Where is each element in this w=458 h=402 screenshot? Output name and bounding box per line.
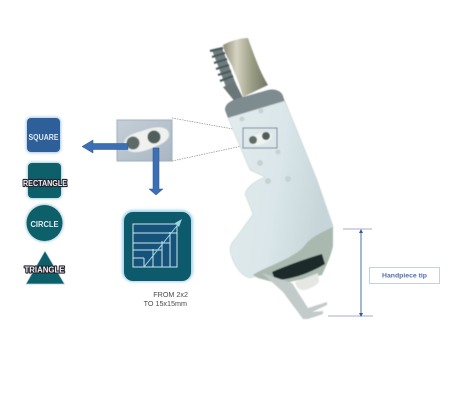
metal tube <box>223 38 268 97</box>
arrow: left to shapes <box>82 140 128 153</box>
lens <box>295 273 319 290</box>
clear guide <box>262 273 327 319</box>
text: size range <box>144 290 188 308</box>
icon: square shape: SQUARE <box>28 133 59 142</box>
hose: ribbed tube <box>210 48 243 103</box>
handpiece device <box>210 38 333 319</box>
tip window <box>253 227 333 284</box>
icon: triangle shape <box>24 251 65 284</box>
grey collar <box>225 89 285 118</box>
dark aperture <box>272 254 325 280</box>
panel: shape options <box>23 117 68 284</box>
label: handpiece tip: Handpiece tip <box>382 272 427 280</box>
icon: spot size grid <box>122 210 193 282</box>
body indents <box>240 108 291 184</box>
icon: rectangle shape <box>23 162 68 199</box>
label: handpiece tip <box>370 268 440 284</box>
icon: triangle shape: TRIANGLE <box>24 266 65 274</box>
text: size range: FROM 2x2 <box>153 290 188 299</box>
arrow: down to size icon <box>149 148 163 195</box>
icon: square shape <box>26 117 61 153</box>
callout: zoomed button photo <box>117 120 172 161</box>
icon: rectangle shape: RECTANGLE <box>23 179 68 188</box>
text: size range: TO 15x15mm <box>144 299 187 308</box>
button panel <box>243 128 277 148</box>
dotted leader lines <box>172 118 242 161</box>
icon: circle shape <box>26 204 64 242</box>
icon: circle shape: CIRCLE <box>30 220 59 229</box>
dimension: handpiece tip <box>328 229 373 317</box>
white body <box>228 101 333 278</box>
